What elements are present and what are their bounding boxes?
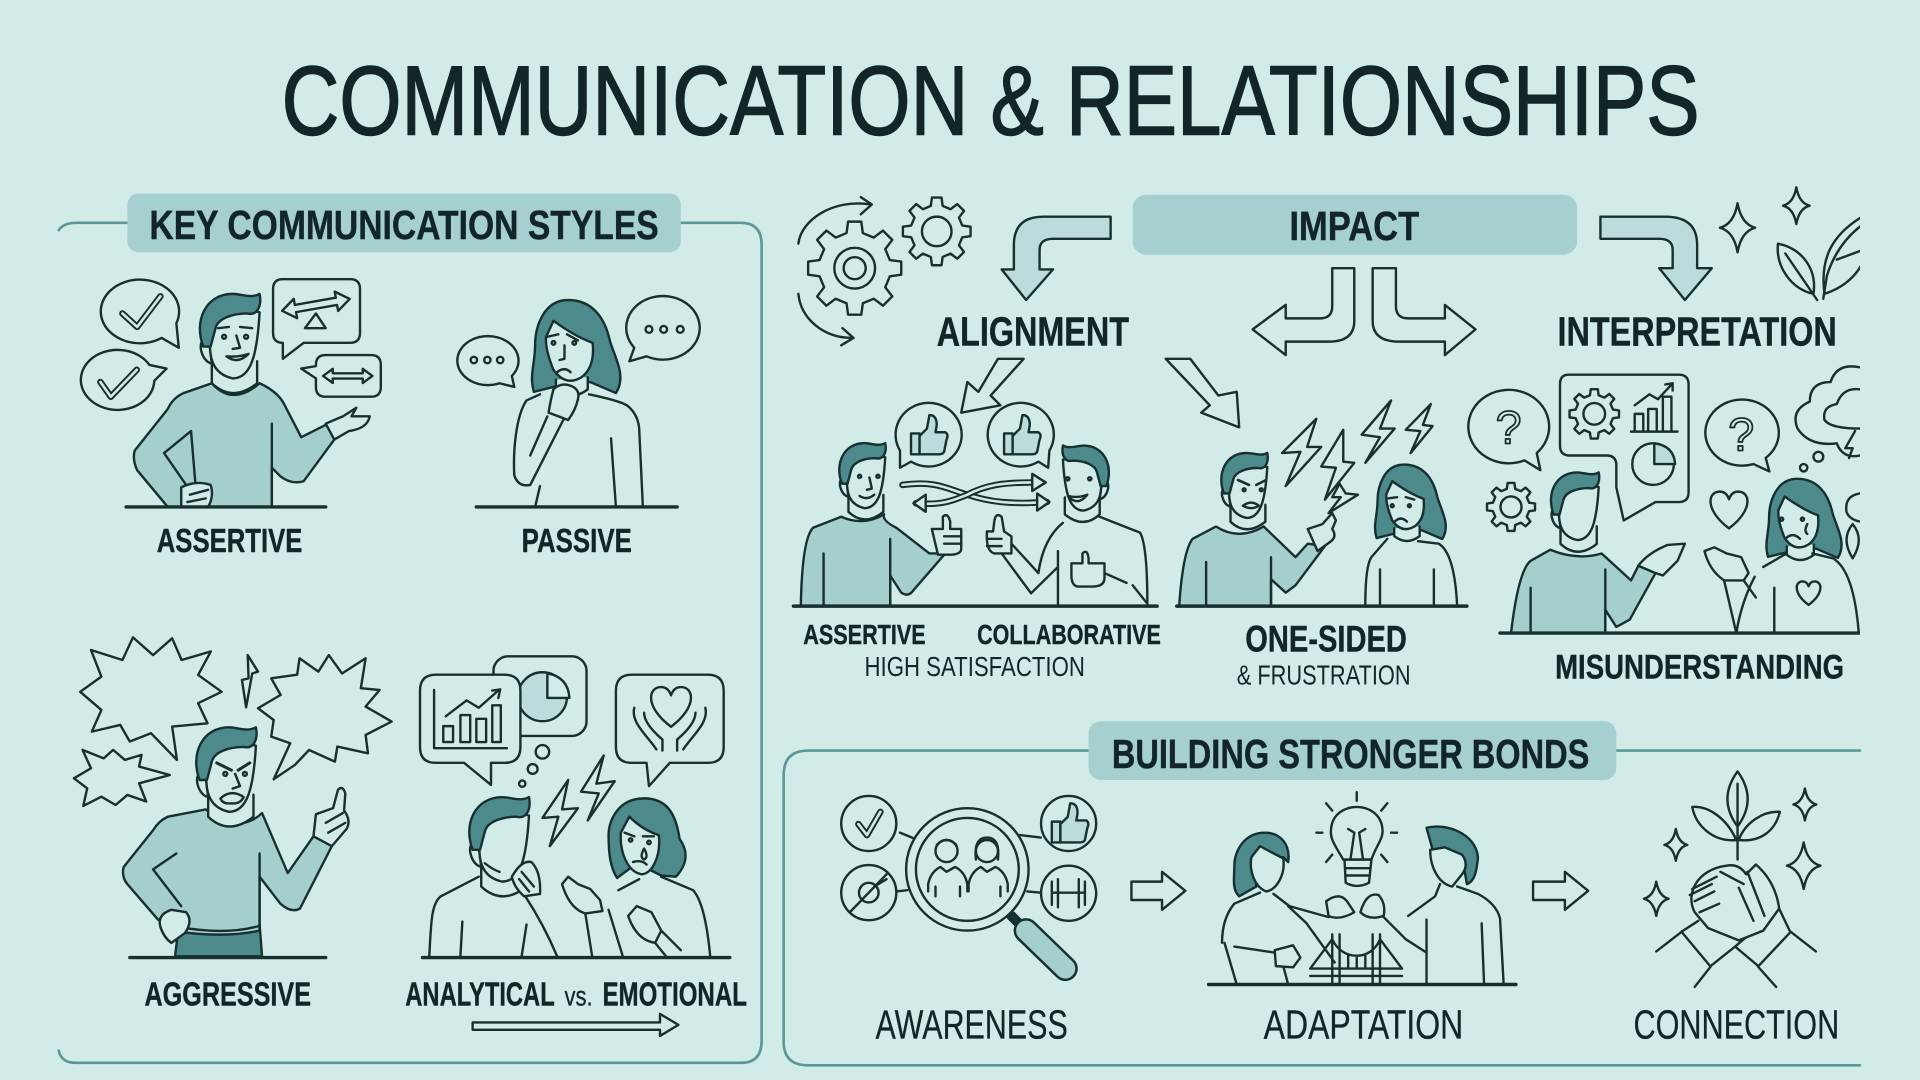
illustration: misunderstanding [1468,366,1860,633]
label: passive: PASSIVE [522,523,632,560]
heading: building stronger bonds: BUILDING STRONGER BONDS [1112,731,1589,777]
labels: alignment outcome: ASSERTIVE [803,619,926,650]
label: interpretation: INTERPRETATION [1558,308,1837,354]
illustration: misunderstanding: ? [1496,401,1522,453]
labels: alignment outcome: COLLABORATIVE [977,619,1161,650]
label: assertive: ASSERTIVE [157,523,302,560]
illustration: connection [1644,771,1820,987]
heading: building stronger bonds [1089,721,1616,780]
arrow: alignment to people [961,359,1024,413]
arrow: right branch [1373,268,1476,355]
label: alignment: ALIGNMENT [937,308,1129,354]
arrow: adaptation to connection [1533,872,1588,910]
illustration: passive [457,296,700,507]
label: adaptation: ADAPTATION [1264,1001,1463,1047]
illustration: alignment people [793,403,1157,606]
heading: key communication styles: KEY COMMUNICATION STYLES [149,202,659,248]
labels: alignment outcome: HIGH SATISFACTION [864,651,1085,682]
label: misunderstanding: MISUNDERSTANDING [1555,648,1844,686]
icon: gears [798,197,971,345]
arrow: left branch [1253,268,1354,355]
labels: alignment outcome [803,619,1161,682]
label: awareness: AWARENESS [876,1001,1068,1047]
icon: sparkles and leaves [1720,187,1867,300]
arrow: to alignment [1002,217,1111,300]
label: aggressive: AGGRESSIVE [144,976,311,1013]
label: analytical vs emotional: vs. [564,980,593,1011]
heading: key communication styles [127,193,681,252]
arrow: awareness to adaptation [1131,872,1185,910]
arrow: to interpretation [1600,217,1712,300]
labels: one-sided [1237,618,1411,690]
panel: impact [793,187,1867,690]
illustration: aggressive [74,637,392,958]
arrow: spectrum [473,1014,678,1036]
label: analytical vs emotional: ANALYTICAL [405,976,555,1013]
panel: key communication styles [59,193,762,1063]
labels: one-sided: ONE-SIDED [1245,618,1407,659]
label: analytical vs emotional: EMOTIONAL [602,976,747,1013]
labels: one-sided: & FRUSTRATION [1237,659,1411,690]
illustration: assertive [81,279,381,507]
heading: impact: IMPACT [1289,203,1419,249]
label: connection: CONNECTION [1633,1001,1839,1047]
illustration: awareness [841,796,1096,969]
illustration: one-sided [1177,400,1467,606]
illustration: analytical vs emotional [420,656,730,958]
panel: building stronger bonds [784,721,1860,1065]
arrow: to one-sided [1166,359,1239,427]
illustration: adaptation [1209,792,1516,984]
heading: impact [1133,195,1577,255]
illustration: misunderstanding: ? [1728,409,1754,461]
label: analytical vs emotional [405,976,747,1013]
